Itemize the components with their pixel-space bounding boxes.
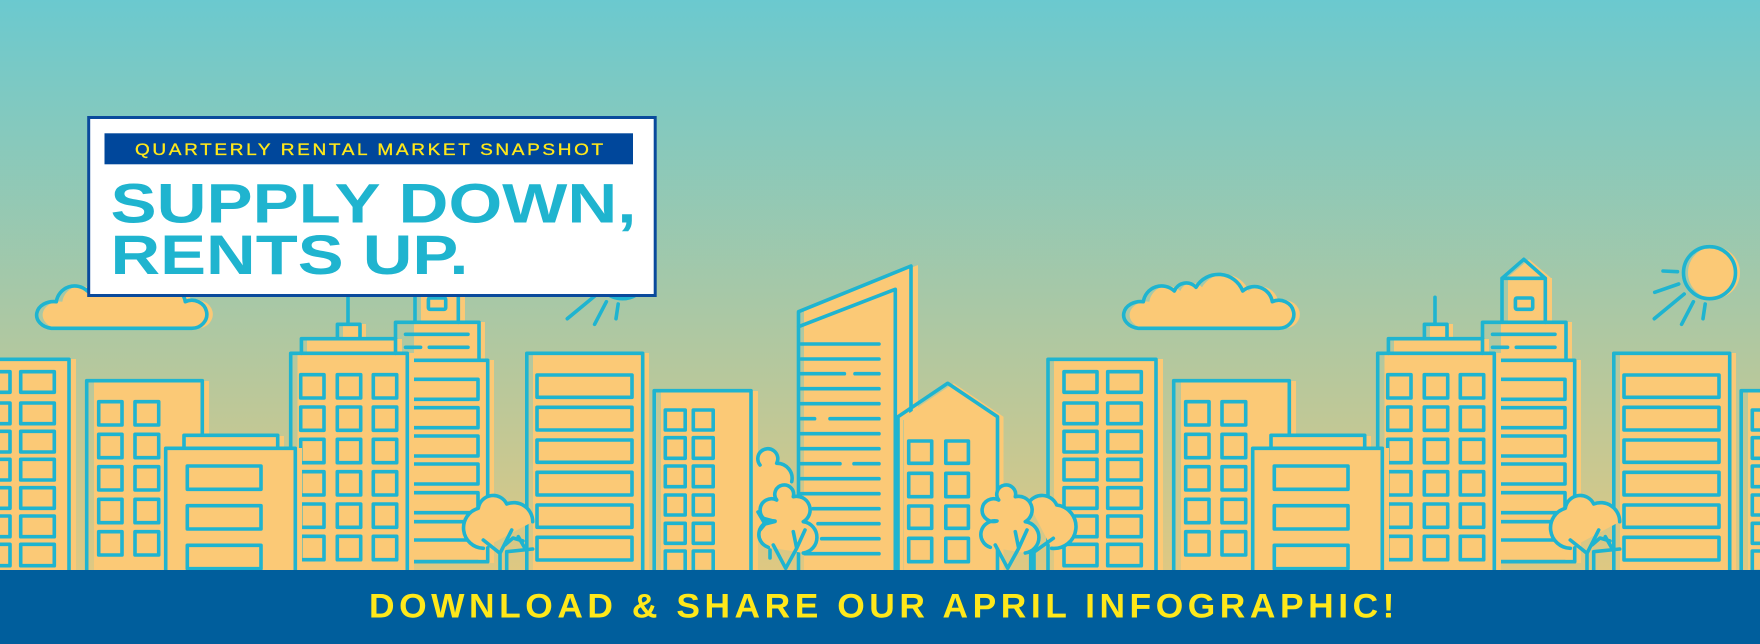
- building: two-column apartments, left edge: [0, 359, 76, 571]
- building: three-column tower with antenna: [291, 297, 414, 571]
- tree in front of skyscraper: [759, 485, 817, 568]
- cloud: [37, 274, 213, 328]
- building: gabled house: [898, 383, 1004, 571]
- billboard panel: [89, 118, 655, 296]
- building: low front block with wide windows: [166, 435, 302, 571]
- tree behind tower: [757, 449, 792, 540]
- building: wide-window tower: [527, 353, 649, 571]
- subtitle band: [104, 133, 633, 164]
- subtitle band: QUARTERLY RENTAL MARKET SNAPSHOT: [135, 140, 603, 159]
- bottom call-to-action bar: DOWNLOAD & SHARE OUR APRIL INFOGRAPHIC!: [369, 588, 1394, 625]
- heading: [110, 172, 636, 286]
- sun: [567, 247, 653, 324]
- skyline repeated on the right: [1124, 247, 1760, 572]
- building: narrow two-column block: [654, 391, 758, 572]
- tree beside house, foreground: [981, 485, 1039, 568]
- notch where the back tree meets the front tree: [758, 512, 775, 558]
- building: tower with peaked roof and stepped base: [396, 259, 494, 563]
- skyline: buildings, trees, cloud and sun: [37, 247, 1076, 572]
- building: two-column mid-rise: [87, 381, 209, 571]
- bottom call-to-action bar: [0, 570, 1760, 644]
- heading: RENTS UP.: [110, 223, 468, 286]
- heading: SUPPLY DOWN,: [110, 172, 636, 234]
- tree by the stepped tower: [464, 495, 533, 571]
- building: two-column apartments, repeated on the right: [1048, 359, 1163, 571]
- building: tall slanted skyscraper: [798, 265, 918, 571]
- tree beside house, background: [1028, 495, 1076, 571]
